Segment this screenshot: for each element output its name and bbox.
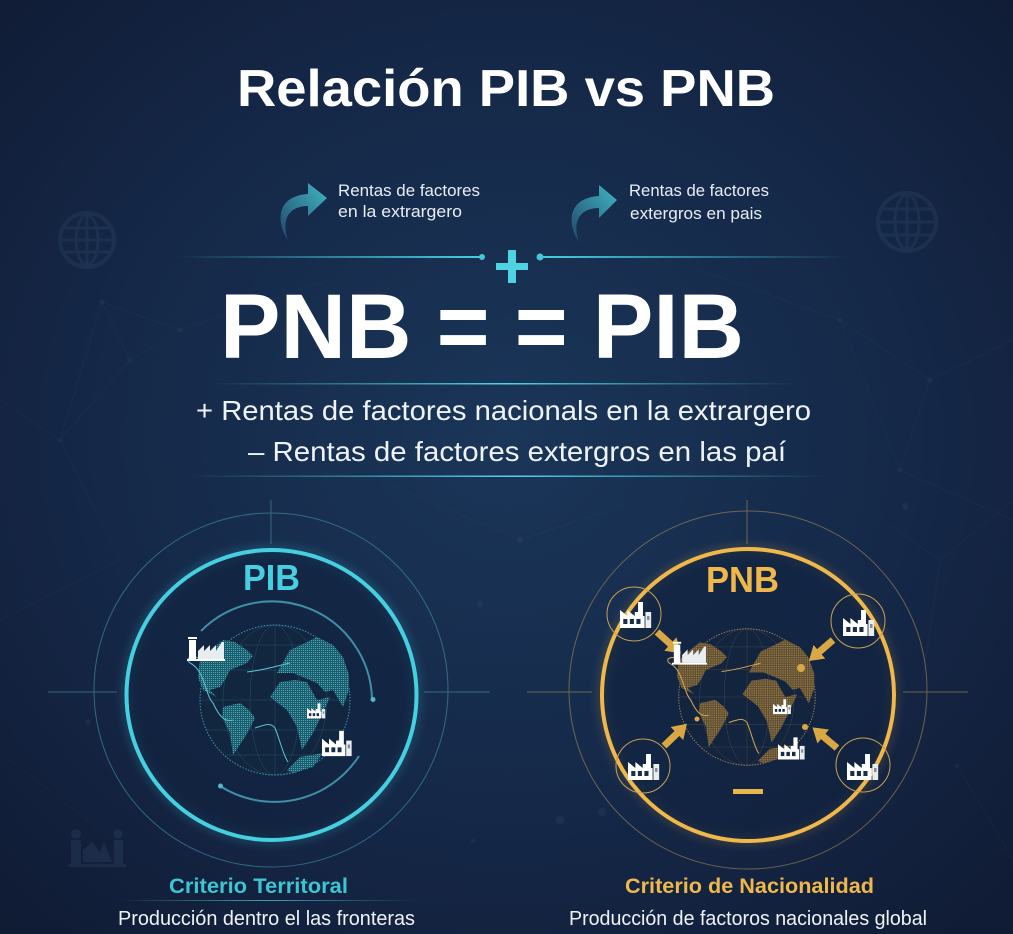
text: rentas de factores en la extrargero: Rentas de factores bbox=[338, 182, 480, 200]
panel: PIB bbox=[48, 500, 490, 867]
text: rentas de factores en la extrargero bbox=[338, 182, 480, 221]
formula terms bbox=[196, 395, 811, 467]
formula: PNB = = PIB bbox=[220, 276, 744, 378]
main ring glow bbox=[126, 550, 416, 840]
main ring bbox=[602, 549, 894, 841]
title: Relación PIB vs PNB bbox=[237, 60, 775, 118]
plus sign bbox=[496, 250, 528, 283]
minus sign bbox=[733, 789, 763, 794]
label PIB: PIB bbox=[243, 557, 300, 598]
icon: factory medium bbox=[322, 731, 352, 756]
text: criterio territoral bbox=[118, 875, 418, 930]
main ring glow bbox=[602, 549, 894, 841]
text: criterio de nacionalidad bbox=[569, 875, 927, 930]
gold dots bbox=[694, 664, 808, 730]
icon: faded globe left bbox=[60, 213, 114, 267]
inner arcs bbox=[201, 601, 372, 802]
icon: factory large bbox=[187, 637, 225, 661]
icon: faded globe right bbox=[878, 193, 936, 251]
text: rentas de factores extergros en pais: extergros en pais bbox=[630, 205, 762, 223]
text: criterio de nacionalidad: Criterio de Nacionalidad bbox=[625, 875, 874, 898]
arrow: rentas left bbox=[281, 183, 327, 240]
network decoration bbox=[0, 270, 1013, 860]
divider bbox=[190, 476, 830, 477]
main ring bbox=[126, 550, 416, 840]
globe bbox=[188, 625, 350, 775]
icon: factory small bbox=[307, 703, 325, 718]
icon: faded figures bbox=[69, 829, 126, 867]
outer ring and crosshair bbox=[48, 500, 490, 867]
text: criterio territoral: Producción dentro el las fronteras bbox=[118, 908, 415, 930]
globe bbox=[668, 629, 815, 765]
top divider with dots bbox=[175, 254, 850, 260]
formula terms: – Rentas de factores extergros en las paí bbox=[248, 436, 786, 467]
text: rentas de factores extergros en pais bbox=[629, 182, 769, 223]
small circles bbox=[607, 587, 890, 793]
text: criterio territoral: Criterio Territoral bbox=[169, 875, 348, 898]
divider bbox=[210, 383, 800, 384]
outer ring and crosshair bbox=[527, 500, 968, 869]
text: criterio de nacionalidad: Producción de factoros nacionales global bbox=[569, 908, 927, 930]
arrows bbox=[651, 625, 843, 755]
icons: factories bbox=[620, 602, 878, 780]
arrow: rentas right bbox=[572, 185, 617, 242]
label PNB: PNB bbox=[706, 559, 779, 600]
text: rentas de factores extergros en pais: Rentas de factores bbox=[629, 182, 769, 200]
text: rentas de factores en la extrargero: en la extrargero bbox=[338, 203, 462, 221]
panel: PNB bbox=[527, 500, 968, 869]
formula terms: + Rentas de factores nacionals en la extrargero bbox=[196, 395, 811, 426]
